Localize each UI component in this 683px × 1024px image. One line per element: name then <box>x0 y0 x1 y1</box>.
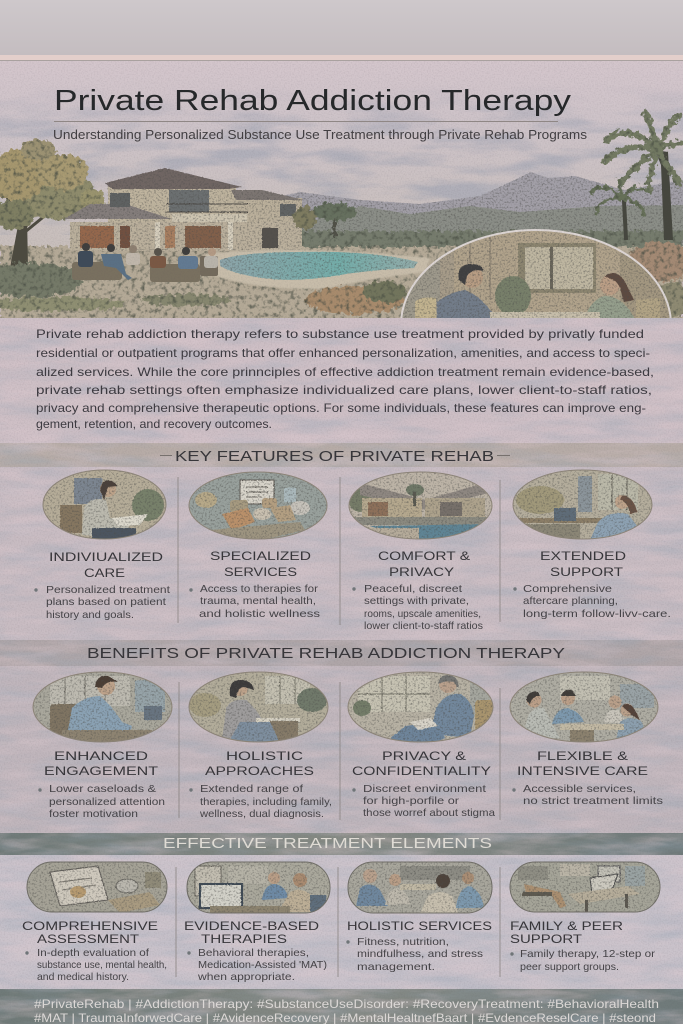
intro text <box>36 327 654 431</box>
element: holistic services: management. <box>357 961 435 973</box>
mountains <box>240 172 683 262</box>
element: evidence-based therapies <box>184 919 327 983</box>
benefit: enhanced engagement: personalized attention <box>49 796 165 808</box>
feature: specialized services: SERVICES <box>224 565 297 579</box>
element: family and peer support <box>510 919 656 973</box>
benefit: holistic approaches: wellness, dual diagnosis. <box>199 808 324 820</box>
benefit: flexible and intensive care <box>512 749 663 807</box>
feature: comfort and privacy: COMFORT & <box>378 549 470 563</box>
element: family and peer support: peer support groups. <box>520 961 619 973</box>
element: holistic services: Fitness, nutrition, <box>357 936 449 948</box>
oval outline: holistic approaches <box>189 672 328 742</box>
pink stripe <box>0 55 683 61</box>
element: comprehensive assessment <box>22 919 167 983</box>
benefit: flexible and intensive care: no strict treatment limits <box>523 795 663 807</box>
illustration: extended support <box>513 470 653 540</box>
header background <box>0 61 683 251</box>
hashtags footer text <box>34 997 659 1024</box>
intro text: gement, retention, and recovery outcomes. <box>36 417 272 431</box>
benefit: flexible and intensive care: INTENSIVE CARE <box>517 764 648 778</box>
element: comprehensive assessment: ASSESSMENT <box>37 932 140 946</box>
small palm <box>592 180 648 240</box>
benefit: holistic approaches: APPROACHES <box>205 764 314 778</box>
feature: individualized care: CARE <box>84 566 125 580</box>
feature: comfort and privacy: rooms, upscale amenities, <box>364 608 481 620</box>
section one band <box>0 443 683 467</box>
element: comprehensive assessment: COMPREHENSIVE <box>22 919 158 933</box>
element: evidence-based therapies: THERAPIES <box>201 932 287 946</box>
intro text: Private rehab addiction therapy refers to substance use treatment provided by privatly funded <box>36 327 644 341</box>
feature: specialized services: SPECIALIZED <box>210 549 311 563</box>
illustration: family and peer support <box>510 862 660 912</box>
element: evidence-based therapies: Medication-Assisted 'MAT) <box>198 959 327 971</box>
left tree <box>0 140 104 297</box>
illustration: individualized care <box>43 470 167 540</box>
element: family and peer support: Family therapy, 12-step or <box>520 948 656 960</box>
feature: specialized services: trauma, mental health, <box>200 595 316 607</box>
feature: extended support: SUPPORT <box>550 565 624 579</box>
feature: extended support: aftercare planning, <box>523 595 618 607</box>
divider lines <box>176 867 500 977</box>
oval outline: individualized care <box>43 470 166 539</box>
feature: individualized care: Personalized treatment <box>46 584 170 596</box>
oval outline: extended support <box>513 470 652 539</box>
seated group <box>72 243 218 282</box>
illustration: privacy and confidentiality <box>348 672 495 745</box>
outline: holistic services <box>348 862 492 913</box>
benefit: enhanced engagement: Lower caseloads & <box>49 783 156 795</box>
section three background <box>0 855 683 990</box>
illustration: holistic services <box>348 862 492 913</box>
pool <box>220 252 418 280</box>
intro text: alized services. While the core prinnciples of effective addiction treatment remain evidence-based, <box>36 365 654 379</box>
benefit: holistic approaches <box>189 749 332 820</box>
element: evidence-based therapies: Behavioral therapies, <box>198 947 309 959</box>
feature: extended support: EXTENDED <box>540 549 626 563</box>
illustration: flexible and intensive care <box>510 672 660 744</box>
oval outline: flexible and intensive care <box>510 672 658 742</box>
element: comprehensive assessment: and medical history. <box>37 971 129 983</box>
illustration: holistic approaches <box>189 672 329 743</box>
element: holistic services: HOLISTIC SERVICES <box>347 919 492 933</box>
feature: comfort and privacy: PRIVACY <box>389 565 454 579</box>
intro text: residential or outpatient programs that offer enhanced personalization, amenities, and access to speci- <box>36 346 650 360</box>
element: holistic services <box>346 919 492 973</box>
feature: specialized services <box>189 549 320 620</box>
feature: extended support: long-term follow-livv-care. <box>523 608 671 620</box>
illustration: comfort and privacy <box>348 472 493 542</box>
outline: comprehensive assessment <box>27 862 167 912</box>
clouds <box>0 85 683 235</box>
oval outline: specialized services <box>189 472 327 539</box>
benefit: holistic approaches: therapies, including family, <box>200 796 332 808</box>
feature: extended support <box>513 549 671 620</box>
benefit: enhanced engagement: foster motivation <box>49 808 138 820</box>
feature: individualized care: plans based on patient <box>46 596 166 608</box>
benefit: privacy and confidentiality: CONFIDENTIALITY <box>352 764 491 778</box>
benefit: privacy and confidentiality: for high-porfile or <box>363 795 460 807</box>
feature: individualized care: INDIVIUALIZED <box>49 550 163 564</box>
hedge line <box>290 231 683 247</box>
element: comprehensive assessment: substance use, mental health, <box>37 959 167 971</box>
pool surround <box>205 250 430 289</box>
section three band <box>0 833 683 855</box>
villa <box>64 168 304 251</box>
outline: family and peer support <box>510 862 660 912</box>
element: comprehensive assessment: In-depth evaluation of <box>37 947 149 959</box>
heading: key features: KEY FEATURES OF PRIVATE REHAB <box>175 448 494 465</box>
right bushes <box>628 242 683 318</box>
feature: comfort and privacy: settings with private, <box>364 595 469 607</box>
illustration: evidence-based therapies <box>187 862 330 913</box>
element: family and peer support: SUPPORT <box>510 932 583 946</box>
illustration: enhanced engagement <box>33 672 173 744</box>
element: evidence-based therapies: EVIDENCE-BASED <box>184 919 319 933</box>
benefit: enhanced engagement <box>38 749 165 820</box>
benefit: enhanced engagement: ENGAGEMENT <box>44 764 159 778</box>
right palm <box>604 112 683 240</box>
heading: effective treatment elements: EFFECTIVE TREATMENT ELEMENTS <box>163 835 492 852</box>
feature: individualized care: history and goals. <box>46 609 134 621</box>
oval outline: comfort and privacy <box>349 472 492 539</box>
feature: individualized care <box>34 550 170 621</box>
benefit: flexible and intensive care: Accessible services, <box>523 783 636 795</box>
benefit: holistic approaches: HOLISTIC <box>226 749 303 763</box>
illustration: comprehensive assessment <box>27 862 167 913</box>
feature: comfort and privacy <box>352 549 483 632</box>
oval outline: enhanced engagement <box>33 672 172 742</box>
element: family and peer support: FAMILY & PEER <box>510 919 623 933</box>
hero scene <box>0 97 683 318</box>
intro text: private rehab settings often emphasize individualized care plans, lower client-to-staff ratios, <box>36 383 652 397</box>
divider lines <box>179 682 500 820</box>
section two band <box>0 640 683 666</box>
benefit: enhanced engagement: ENHANCED <box>54 749 148 763</box>
benefit: privacy and confidentiality: Discreet environment <box>363 783 486 795</box>
divider lines <box>178 477 500 625</box>
intro text: privacy and comprehensive therapeutic options. For some individuals, these features can improve eng- <box>36 401 646 415</box>
inset counselling arch <box>400 229 672 318</box>
mid palms <box>293 203 357 238</box>
section one background <box>0 466 683 640</box>
outline: evidence-based therapies <box>187 862 330 913</box>
feature: comfort and privacy: lower client-to-staff ratios <box>364 620 483 632</box>
feature: extended support: Comprehensive <box>523 583 612 595</box>
hashtags footer text: #PrivateRehab | #AddictionTherapy: #SubstanceUseDisorder: #RecoveryTreatment: #BehavioralHealth <box>34 997 659 1011</box>
benefit: privacy and confidentiality: those worref about stigma <box>363 807 495 819</box>
ground <box>0 246 683 320</box>
subtitle: Understanding Personalized Substance Use Treatment through Private Rehab Programs <box>53 127 588 142</box>
benefit: privacy and confidentiality: PRIVACY & <box>382 749 466 763</box>
section two background <box>0 666 683 834</box>
element: evidence-based therapies: when appropriate. <box>197 971 295 983</box>
footer band <box>0 989 683 1024</box>
oval outline: privacy and confidentiality <box>348 672 493 742</box>
element: holistic services: mindfulhess, and stress <box>357 948 483 960</box>
heading: benefits: BENEFITS OF PRIVATE REHAB ADDICTION THERAPY <box>87 645 565 662</box>
illustration: specialized services <box>190 472 326 538</box>
benefit: holistic approaches: Extended range of <box>200 783 303 795</box>
top blank band <box>0 0 683 55</box>
feature: specialized services: Access to therapies for <box>200 583 319 595</box>
benefit: flexible and intensive care: FLEXIBLE & <box>537 749 628 763</box>
intro panel background <box>0 318 683 443</box>
feature: comfort and privacy: Peaceful, discreet <box>364 583 462 595</box>
title: Private Rehab Addiction Therapy <box>54 85 572 117</box>
feature: specialized services: and holistic wellness <box>199 608 320 620</box>
bottom bushes <box>0 281 407 314</box>
benefit: privacy and confidentiality <box>352 749 495 819</box>
